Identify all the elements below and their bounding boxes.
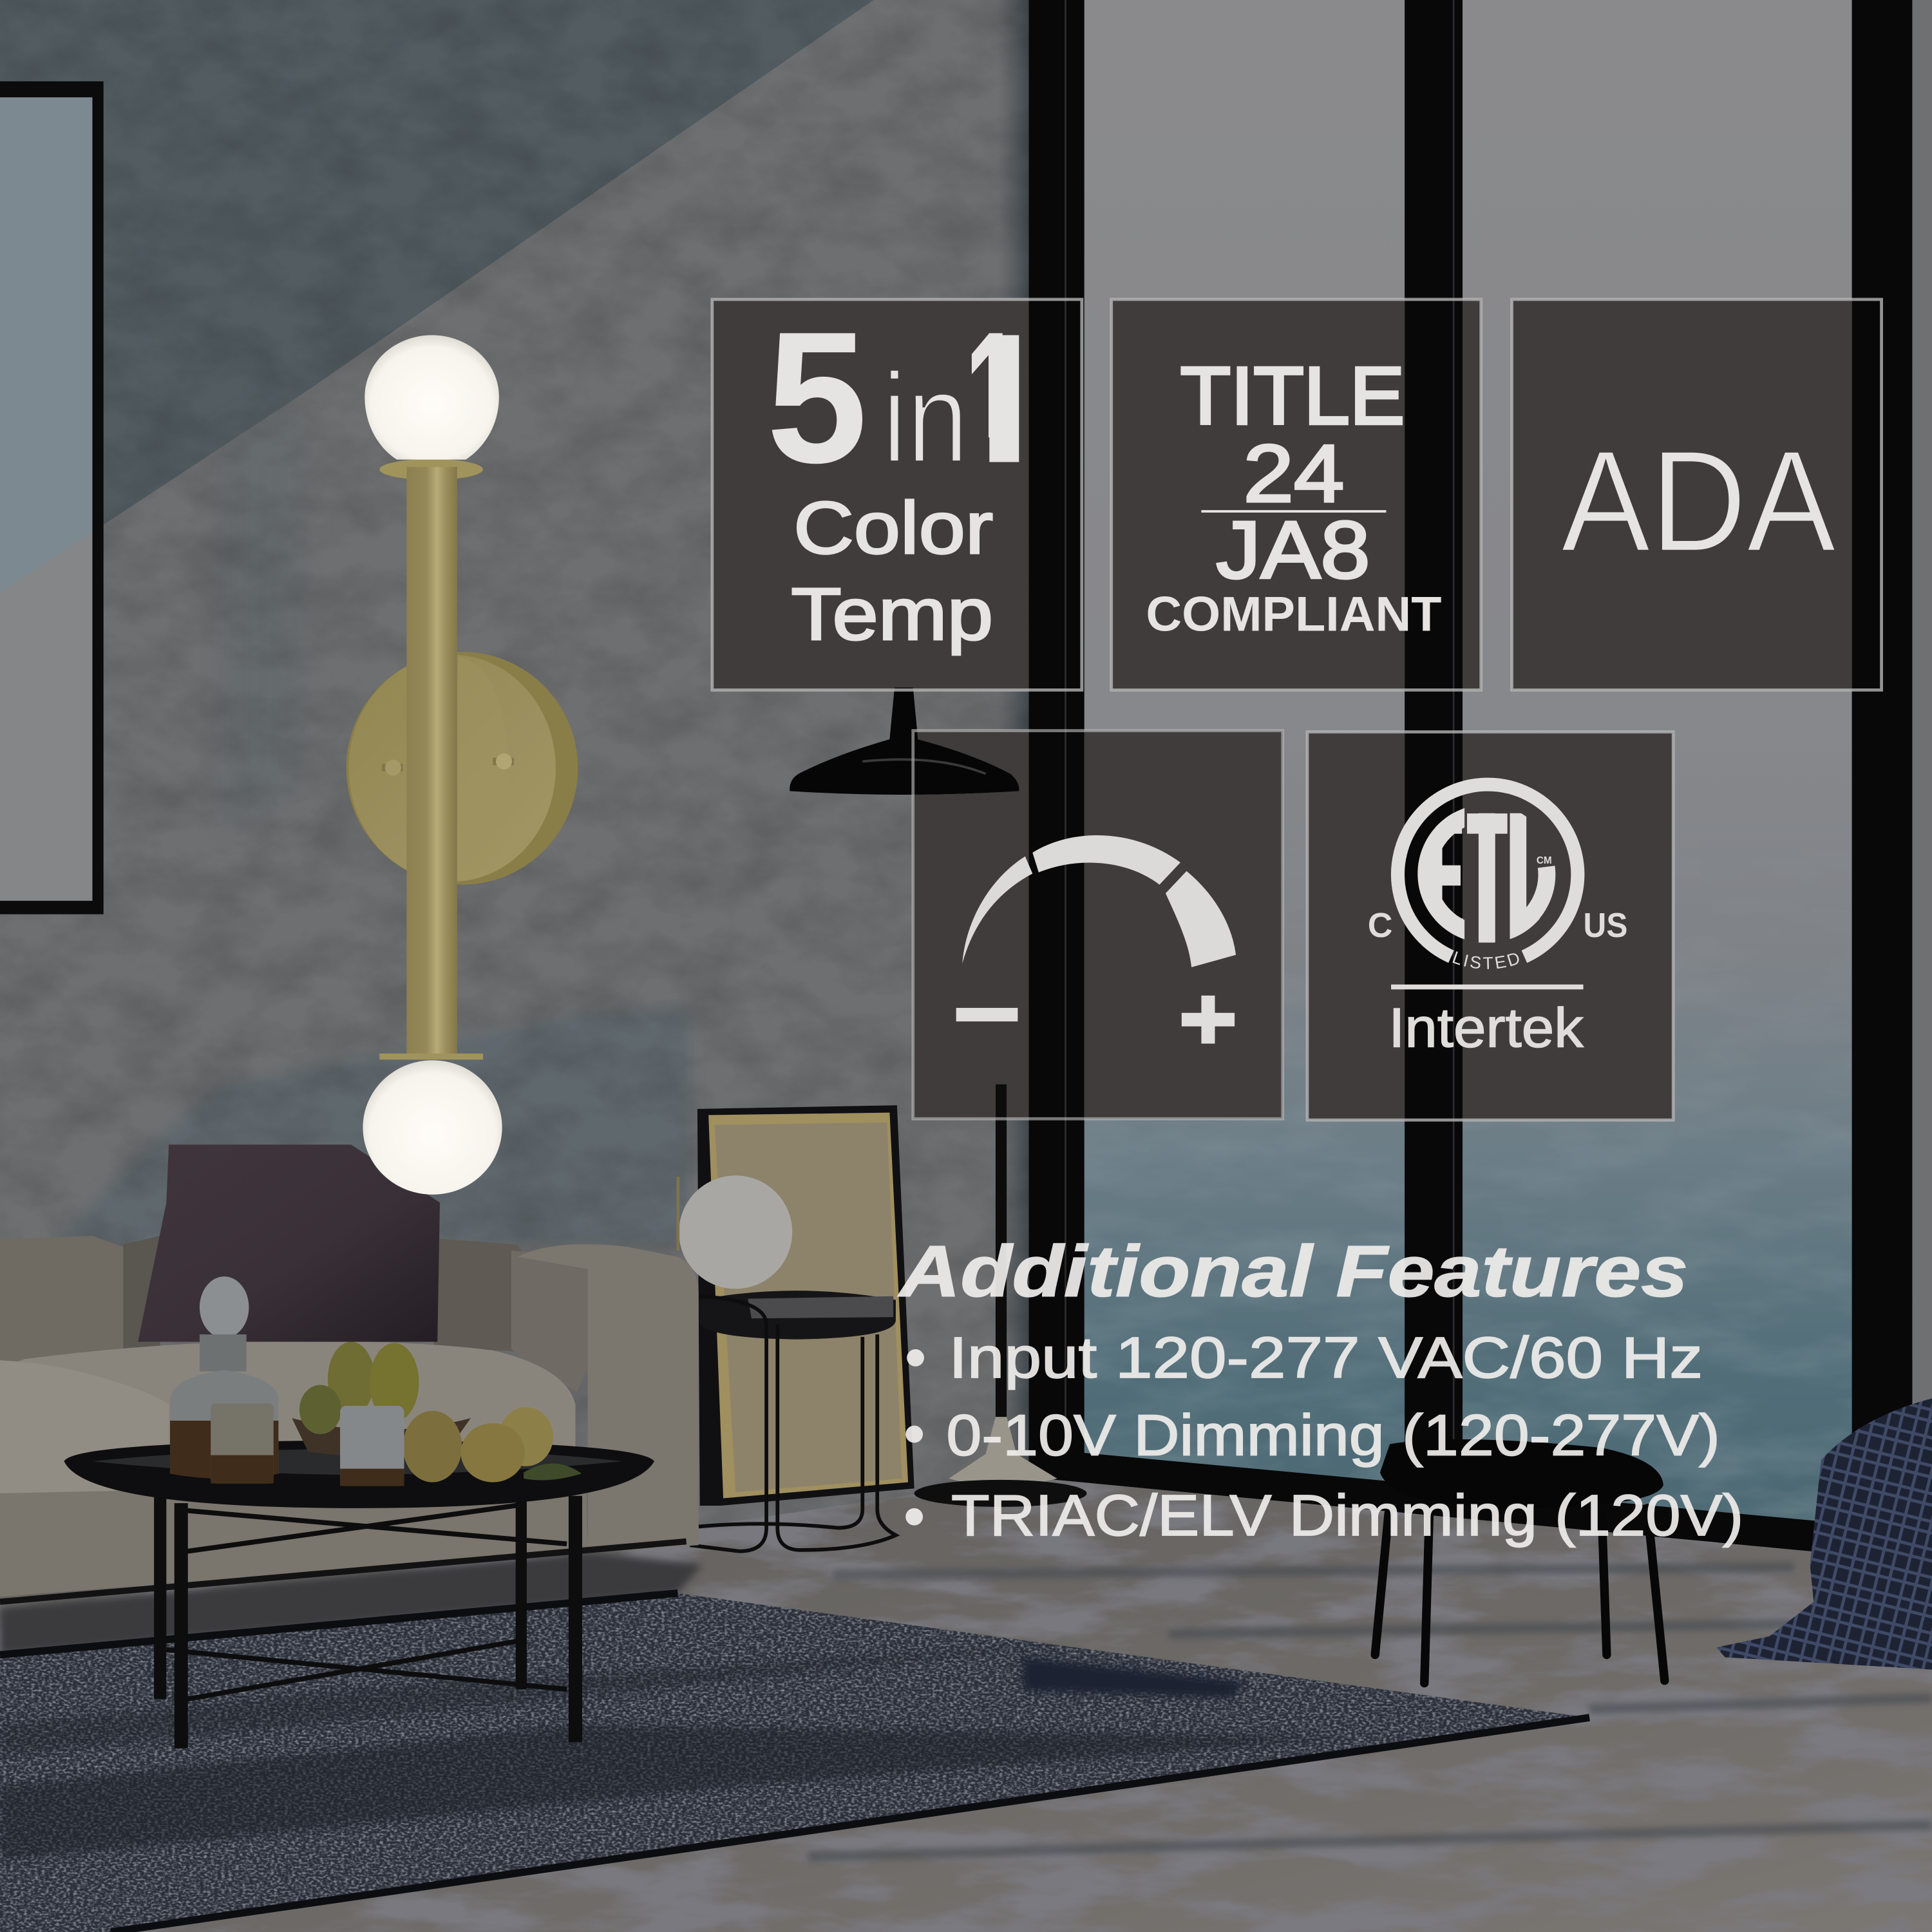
- Color label: Color: [793, 487, 993, 569]
- icon: ETL mark: E: [1432, 775, 1465, 978]
- panel: 5 in 1 color temp: [712, 292, 1082, 690]
- round black coffee table: [64, 1441, 654, 1748]
- big 1: [965, 292, 1021, 502]
- icon: ETL mark: T: [1466, 775, 1508, 978]
- icon: ETL mark: CM: [1537, 855, 1552, 866]
- plaid blanket on bed: [1716, 1399, 1932, 1669]
- Temp label: Temp: [791, 573, 993, 656]
- icon: ETL mark: LISTED: [1453, 951, 1519, 969]
- blue woven rug: [0, 1589, 1602, 1932]
- concrete wall: [0, 0, 1035, 1627]
- framed wall art: [0, 81, 104, 914]
- panel: ETL listed Intertek: [1306, 730, 1675, 1122]
- icon: minus: [956, 1008, 1018, 1021]
- window glass with misty forest view: [1032, 0, 1922, 1589]
- bottom collar: [379, 1054, 483, 1059]
- US mark: US: [1584, 907, 1627, 945]
- black window frames: [1029, 0, 1932, 1577]
- TITLE: TITLE: [1180, 350, 1405, 441]
- JA8: JA8: [1216, 504, 1370, 595]
- icon: plus: [1182, 996, 1235, 1044]
- big 1: 1: [965, 292, 1021, 502]
- text block: additional features: [897, 1231, 1743, 1548]
- brass wall canopy: [346, 652, 578, 885]
- decanter and glasses on table: [170, 1276, 278, 1484]
- C mark: C: [1368, 907, 1392, 945]
- wire side table with book and white lamp: [676, 1175, 896, 1551]
- bottom glass globe: [363, 1060, 502, 1195]
- sofa: [0, 1236, 699, 1602]
- black stool: [1375, 1439, 1665, 1683]
- top glass globe: [365, 335, 499, 460]
- floor lamp with black shade: [790, 688, 1087, 1507]
- bullet: TRIAC dimming: TRIAC/ELV Dimming (120V): [951, 1484, 1743, 1548]
- divider rule: [1201, 510, 1386, 513]
- rule: [1391, 985, 1584, 989]
- big 5: 5: [766, 292, 867, 502]
- icon: dimmer arc: [962, 835, 1236, 967]
- panel: ADA: [1512, 299, 1882, 690]
- bullet: input: Input 120-277 VAC/60 Hz: [949, 1326, 1703, 1390]
- purple throw pillow: [138, 1144, 440, 1342]
- COMPLIANT: COMPLIANT: [1146, 587, 1442, 642]
- concrete floor: [0, 1466, 1932, 1932]
- heading: Additional Features: [897, 1231, 1688, 1312]
- Intertek: Intertek: [1388, 997, 1584, 1059]
- icon: ETL mark: [1391, 778, 1584, 969]
- ADA text: ADA: [1561, 421, 1836, 582]
- sconce: brass double globe fixture: [346, 335, 578, 1195]
- panel: title 24 JA8 compliant: [1112, 299, 1481, 690]
- leaning canvas: [697, 1105, 914, 1506]
- panel: dimmable: [913, 731, 1283, 1119]
- icon: ETL mark: L: [1510, 775, 1546, 978]
- bullet: 0-10V dimming: 0-10V Dimming (120-277V): [946, 1404, 1720, 1468]
- bowl of pears and pomegranates: [292, 1342, 582, 1486]
- 24: 24: [1243, 428, 1344, 519]
- right wall sliver: [1912, 0, 1932, 1602]
- top collar: [379, 459, 483, 480]
- thin in: in: [882, 346, 969, 489]
- brass stem: [406, 467, 457, 1055]
